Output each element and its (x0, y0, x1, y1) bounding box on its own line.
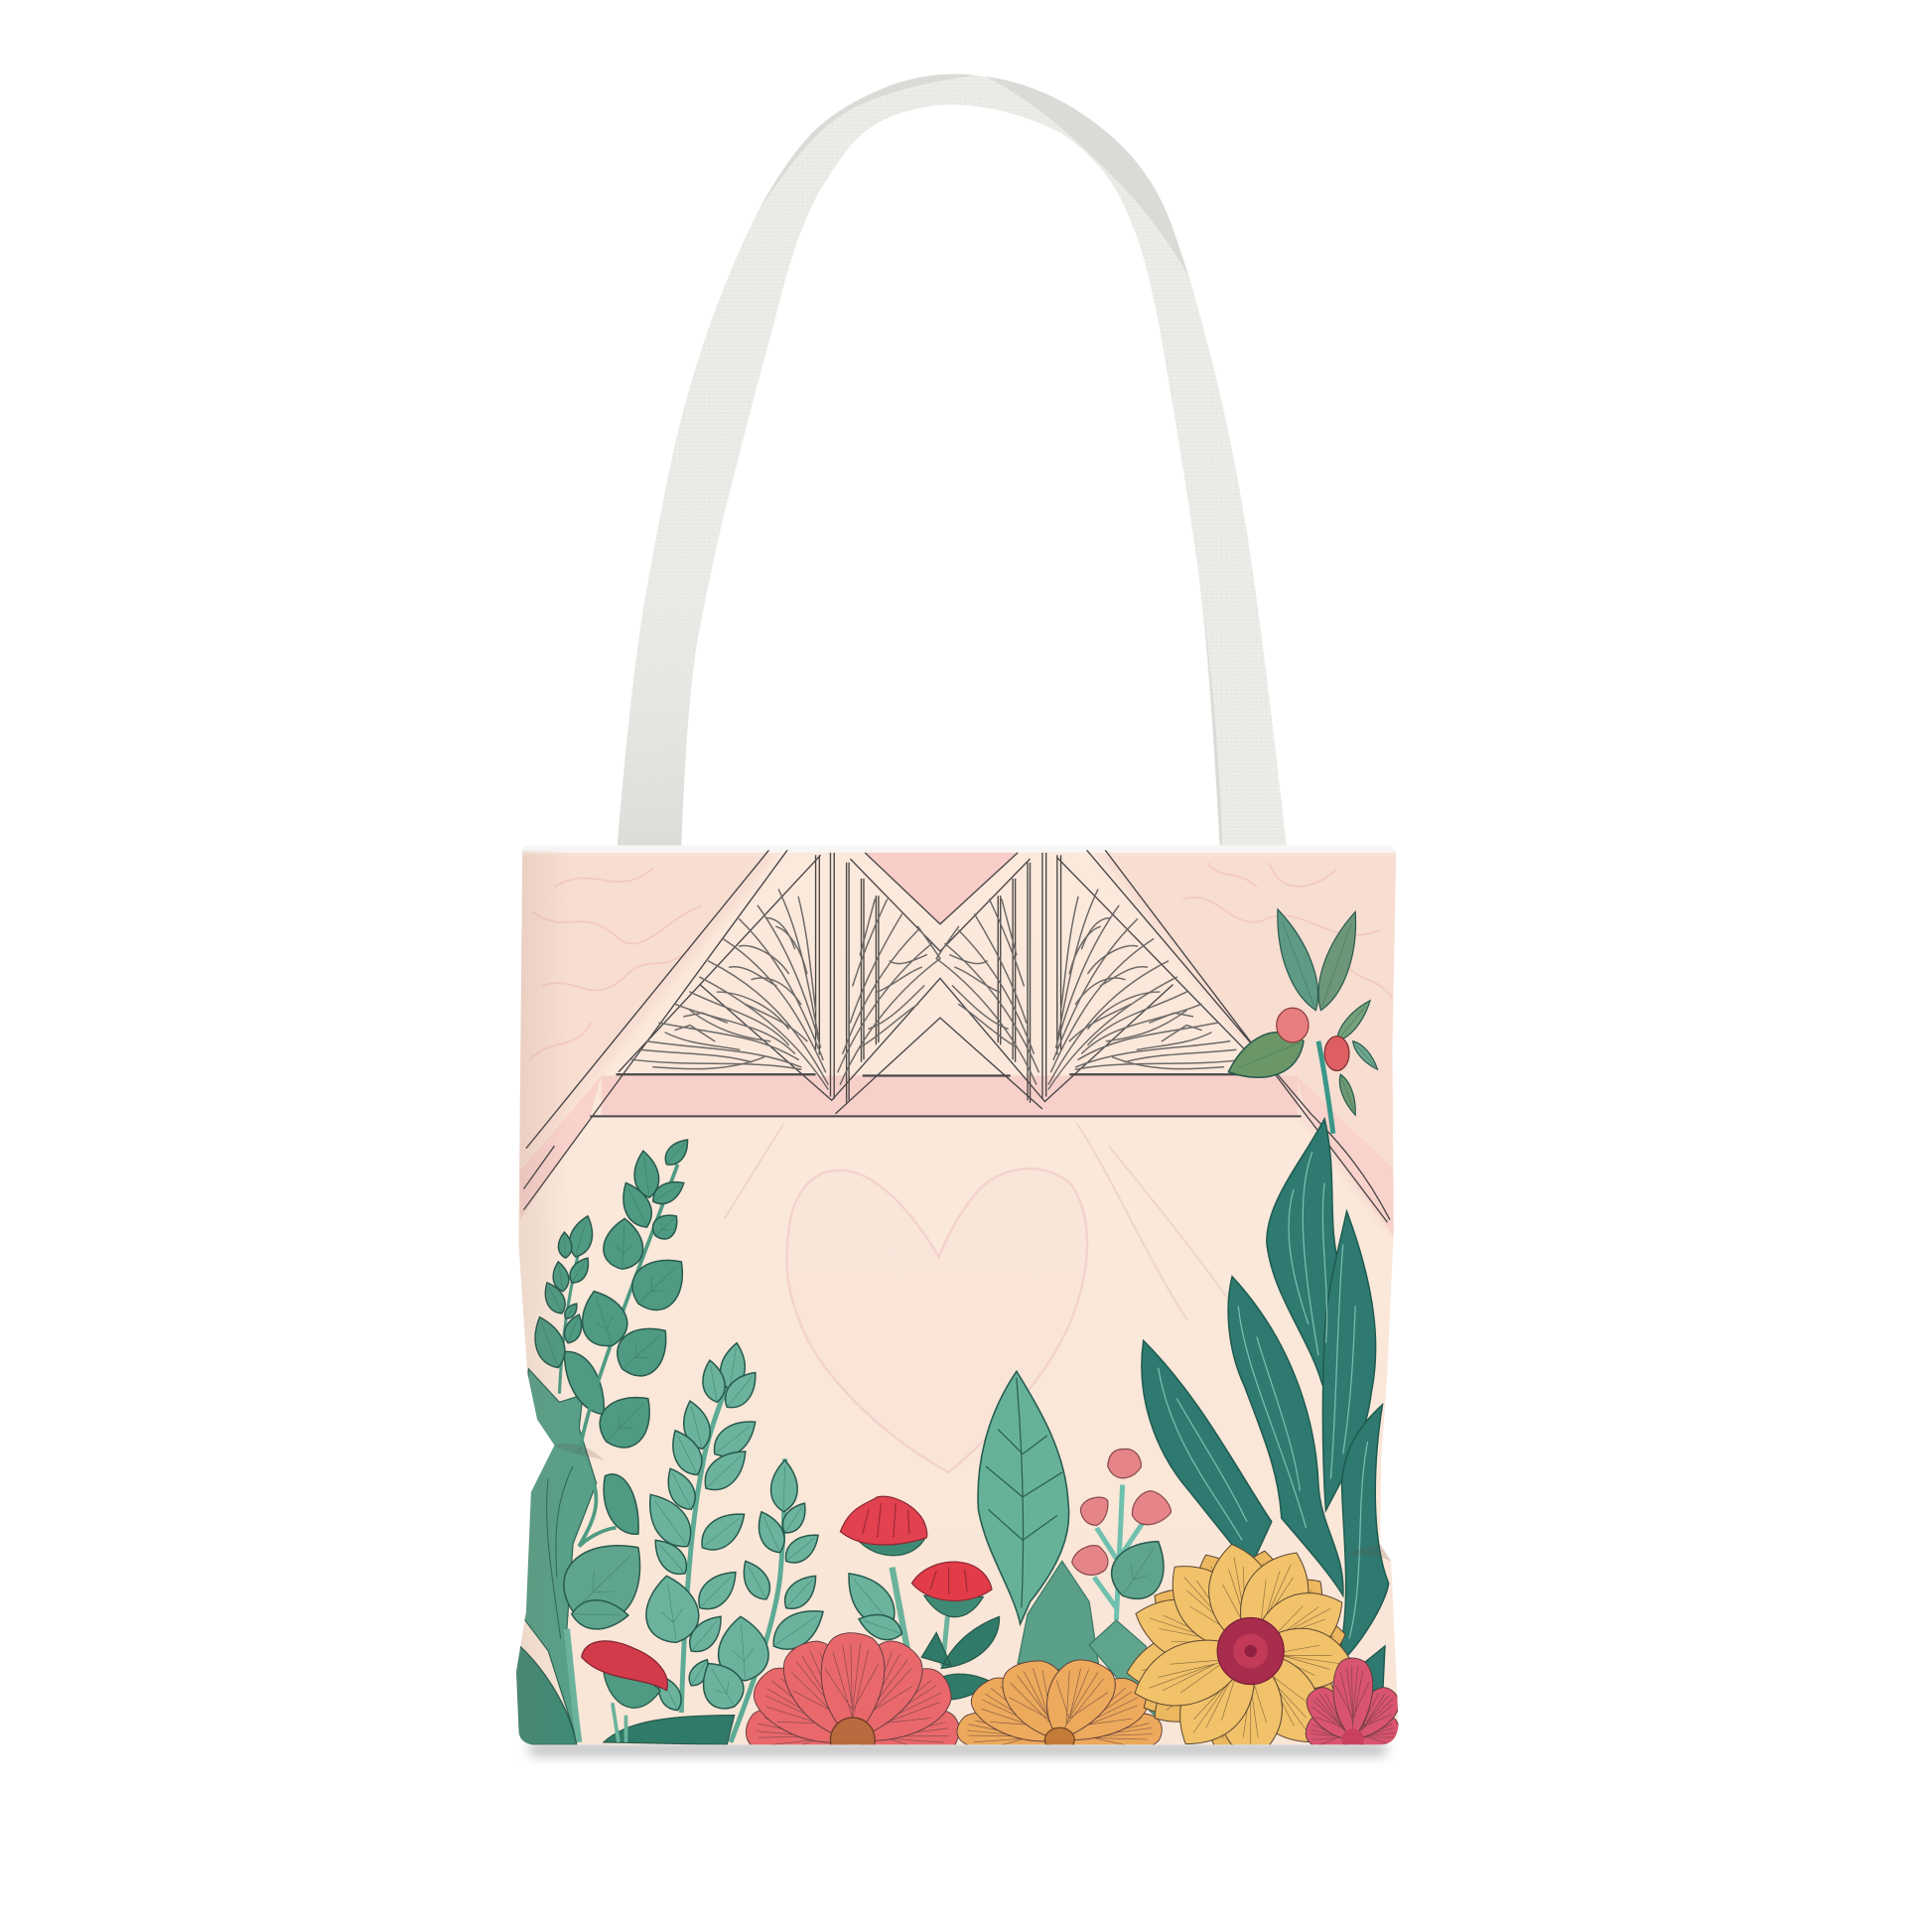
fabric fold shading (515, 850, 1391, 1749)
fabric base (505, 838, 1417, 1756)
pink marble corners (515, 853, 1405, 1244)
pink side wedges (520, 1075, 1395, 1238)
lower left leaves (563, 1545, 641, 1612)
inner chevron lines (619, 853, 1267, 1114)
faint marble diagonals (724, 1124, 1228, 1321)
top right sprig (1220, 904, 1381, 1134)
teal leaf veins (1159, 1152, 1368, 1639)
bag body (505, 838, 1417, 1764)
drop shadow (530, 1744, 1386, 1754)
vertical stripes left (816, 853, 879, 1103)
feather fan left (632, 890, 940, 1089)
watermark heart (786, 1169, 1087, 1472)
sprig B (534, 1215, 594, 1394)
vertical stripes right (998, 853, 1061, 1103)
red flower center (836, 1496, 927, 1660)
sprig A (578, 1139, 689, 1453)
yellow flower (1126, 1544, 1350, 1745)
back petals (1131, 1543, 1352, 1759)
coral flower (745, 1632, 959, 1745)
outer frame lines (523, 850, 1390, 1222)
red flower right (911, 1562, 1000, 1700)
mid green leaf (1018, 1561, 1100, 1676)
sprig C (645, 1342, 757, 1714)
top hem (522, 846, 1396, 853)
pink buds (1072, 1449, 1179, 1620)
geometric pattern (523, 850, 1390, 1222)
sprig buds (1277, 1008, 1309, 1042)
handle left fade (618, 523, 712, 845)
green base leaves (1089, 1620, 1159, 1719)
small red flower left (582, 1641, 667, 1742)
sprig D (703, 1458, 824, 1743)
large teal leaf (978, 1371, 1069, 1624)
handle (618, 74, 1287, 845)
dark leaves under flower (921, 1616, 1000, 1700)
band rules (617, 1074, 1267, 1075)
pink band (602, 1075, 1298, 1116)
tote bag product illustration (516, 73, 1398, 1761)
pink flower corner (1300, 1658, 1406, 1756)
left foliage base (511, 1351, 735, 1744)
dark teal tall leaves (1142, 1119, 1389, 1698)
handle twist shading (759, 74, 1222, 845)
marble veins (530, 863, 1392, 1059)
feather fan right (936, 890, 1244, 1089)
pink center triangle (865, 853, 1018, 924)
orange flower (957, 1660, 1163, 1745)
